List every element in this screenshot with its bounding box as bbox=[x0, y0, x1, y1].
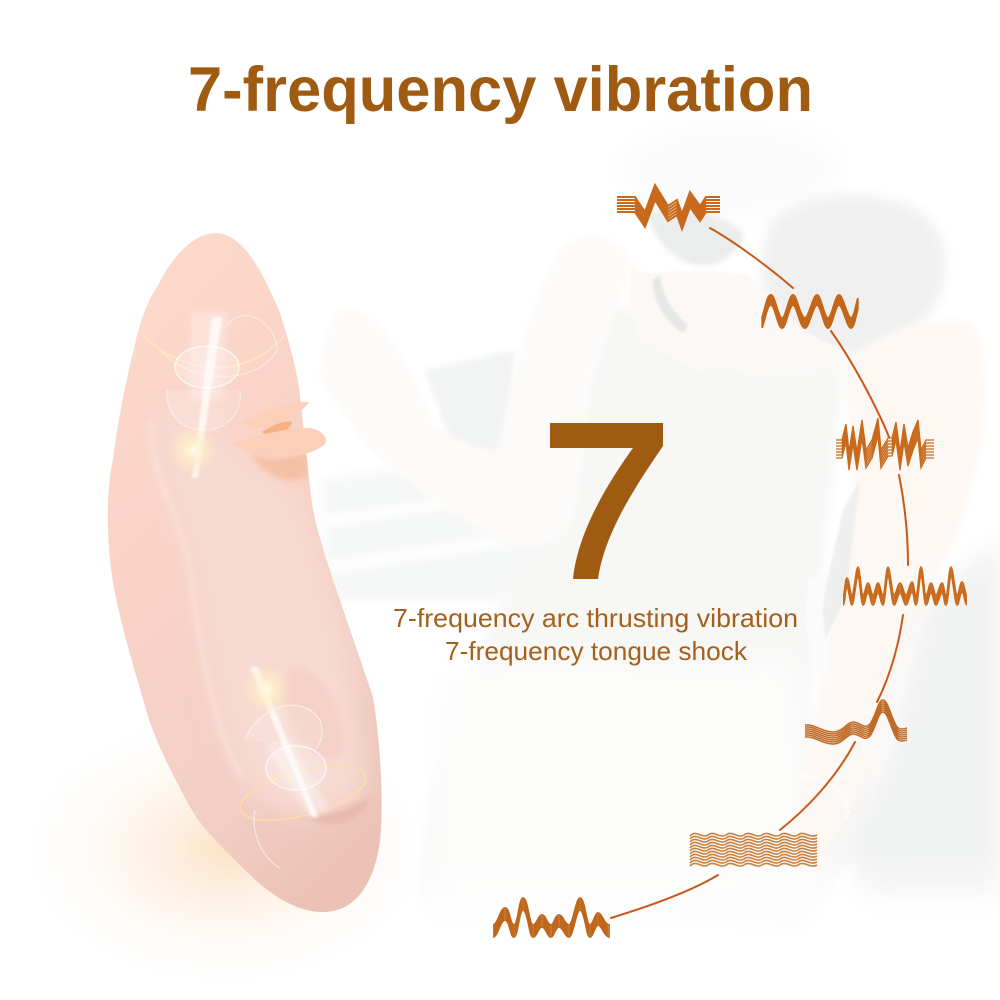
wave icon 6 bbox=[690, 833, 817, 866]
arc connector lines bbox=[611, 228, 908, 918]
left arm bbox=[320, 235, 633, 550]
hair bbox=[762, 195, 946, 355]
right arm bbox=[790, 320, 985, 850]
hair under chin bbox=[647, 209, 745, 265]
wave icon 3 bbox=[836, 418, 934, 470]
right side shadow bbox=[840, 540, 1000, 900]
subtitle text bbox=[393, 603, 798, 666]
surface shading bbox=[150, 400, 372, 824]
neck and chest skin bbox=[630, 263, 842, 372]
lower lip shadow bbox=[305, 800, 368, 824]
tongue bbox=[233, 402, 326, 456]
lower motor bbox=[235, 664, 371, 868]
subtitle text: 7-frequency tongue shock bbox=[445, 636, 748, 666]
wave icon 1 bbox=[617, 185, 720, 229]
ribbon bbox=[815, 480, 860, 660]
wave icon 7 bbox=[493, 898, 610, 937]
inner lighter band bbox=[161, 400, 365, 817]
subtitle text: 7-frequency arc thrusting vibration bbox=[393, 603, 798, 633]
bench bbox=[320, 455, 560, 600]
dress bbox=[420, 300, 850, 930]
tongue shadow bbox=[250, 450, 312, 480]
hair strand bbox=[653, 275, 688, 333]
wave icon 4 bbox=[843, 567, 967, 605]
wave icon 5 bbox=[805, 700, 907, 744]
device body bbox=[108, 233, 382, 912]
upper motor bbox=[143, 312, 285, 478]
wave icon 2 bbox=[762, 295, 858, 328]
groove highlight bbox=[150, 420, 245, 780]
textured dots area bbox=[288, 670, 342, 758]
face haze bbox=[620, 120, 840, 220]
product: pink device bbox=[108, 233, 382, 912]
bracelet bbox=[786, 776, 848, 820]
big number 7 bbox=[550, 423, 663, 579]
title: 7-frequency vibration bbox=[188, 55, 813, 125]
floor glow under product bbox=[10, 705, 440, 995]
bottom fade bbox=[0, 850, 1000, 960]
